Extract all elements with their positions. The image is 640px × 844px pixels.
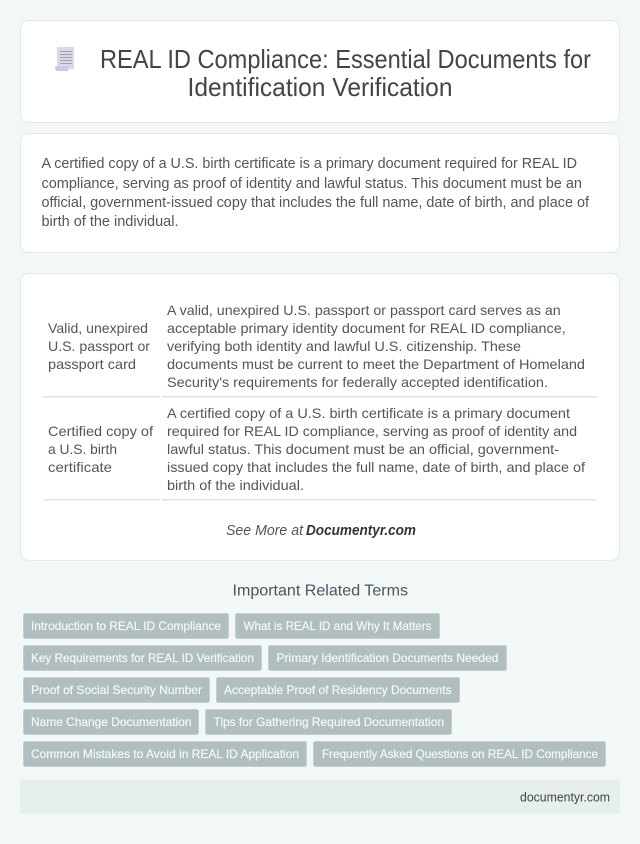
tag: Common Mistakes to Avoid in REAL ID Application [31, 747, 299, 761]
tag: Name Change Documentation [31, 715, 192, 729]
row label: birth certificate: a U.S. birth [48, 441, 117, 457]
panel: document table [20, 274, 620, 560]
text block: introduction paragraph: birth of the individual. [42, 214, 178, 230]
tag: Key Requirements for REAL ID Verification [31, 651, 254, 665]
tag: Proof of Social Security Number [31, 683, 202, 697]
tag [24, 614, 228, 638]
tag: Tips for Gathering Required Documentation [214, 715, 444, 729]
heading: title: Identification Verification [188, 74, 452, 102]
tag [206, 710, 452, 734]
row label: passport: passport card [48, 356, 136, 372]
icon: document scroll [55, 47, 74, 71]
tag [24, 710, 198, 734]
text block: introduction paragraph: compliance, serving as proof of identity and lawful status. This document must be an [42, 176, 582, 192]
row description: birth certificate: lawful status. This document must be an official, government- [167, 441, 559, 457]
tag [216, 678, 460, 702]
tag: Acceptable Proof of Residency Documents [224, 683, 452, 697]
row description: passport: verifying both identity and lawful U.S. citizenship. These [167, 338, 521, 354]
tag: What is REAL ID and Why It Matters [244, 619, 432, 633]
row description: passport: Security's requirements for federally accepted identification. [167, 374, 548, 390]
tag list: related terms [24, 614, 606, 766]
table row: passport [43, 302, 597, 398]
heading: title [100, 46, 591, 102]
tag [24, 742, 306, 766]
row description: passport: documents must be current to meet the Department of Homeland [167, 356, 585, 372]
see more link [226, 523, 416, 539]
tag [236, 614, 440, 638]
panel: title card [20, 20, 620, 122]
footer [20, 780, 620, 814]
row label: birth certificate: Certified copy of [48, 423, 153, 439]
row label: birth certificate: certificate [48, 459, 112, 475]
tag [268, 646, 506, 670]
text block: introduction paragraph: official, government-issued copy that includes the full name, date of birth, and place of [42, 195, 590, 211]
heading: title: REAL ID Compliance: Essential Documents for [100, 46, 591, 74]
row label: passport: U.S. passport or [48, 338, 150, 354]
tag [24, 678, 210, 702]
row label: passport: Valid, unexpired [48, 320, 148, 336]
tag [24, 646, 262, 670]
row label: passport [48, 320, 150, 372]
tag: Primary Identification Documents Needed [276, 651, 498, 665]
row description: passport: acceptable primary identity document for REAL ID compliance, [167, 320, 566, 336]
row description: passport: A valid, unexpired U.S. passport or passport card serves as an [167, 302, 561, 318]
footer: documentyr.com [520, 790, 610, 804]
table row: birth certificate [43, 405, 597, 500]
see more link: Documentyr.com [306, 523, 416, 539]
row description: birth certificate: birth of the individual. [167, 477, 304, 493]
row description: birth certificate: issued copy that includes the full name, date of birth, and place of [167, 459, 585, 475]
tag: Frequently Asked Questions on REAL ID Compliance [322, 747, 598, 761]
see more link: See More at [226, 523, 304, 539]
row description: birth certificate [167, 405, 585, 493]
row description: birth certificate: A certified copy of a U.S. birth certificate is a primary document [167, 405, 570, 421]
text block: introduction paragraph [42, 156, 590, 230]
tag [314, 742, 606, 766]
panel: introduction [20, 134, 620, 252]
heading: important related terms: Important Related Terms [232, 582, 408, 600]
text block: introduction paragraph: A certified copy of a U.S. birth certificate is a primary document required for REAL ID [42, 156, 577, 172]
tag: Introduction to REAL ID Compliance [31, 619, 221, 633]
row label: birth certificate [48, 423, 153, 475]
row description: passport [167, 302, 585, 390]
row description: birth certificate: required for REAL ID compliance, serving as proof of identity and [167, 423, 577, 439]
